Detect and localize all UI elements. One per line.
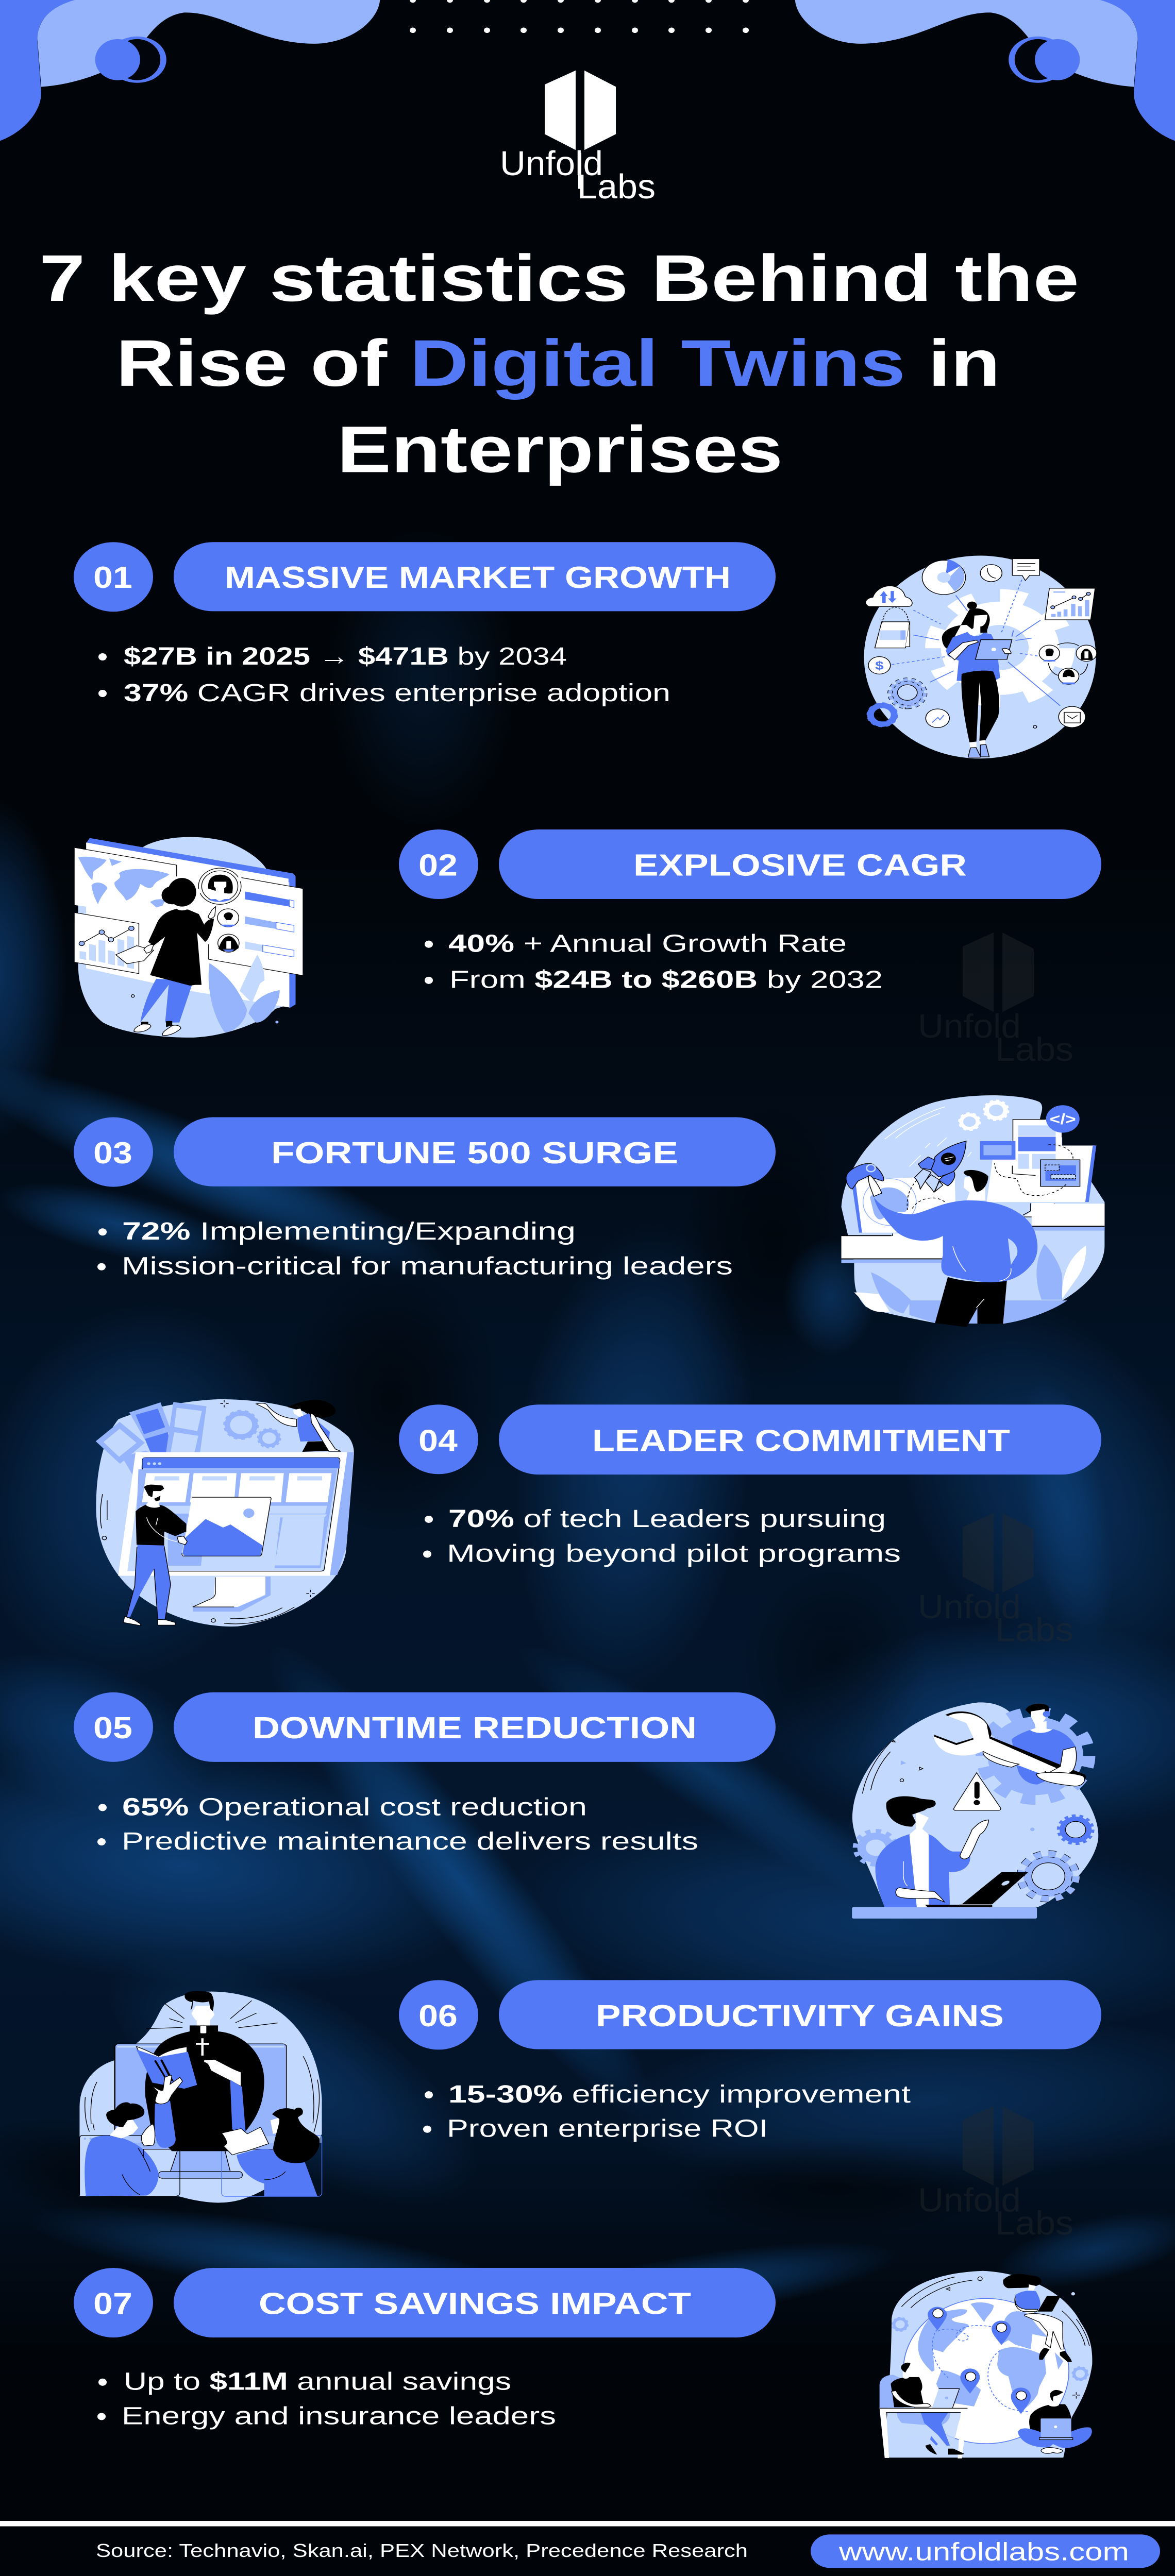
number badge 06: 06 — [418, 1998, 458, 2033]
section 04 — [96, 1399, 1101, 1626]
bullets 01: $27B in 2025 → $471B by 2034 — [124, 642, 567, 670]
number badge 02: 02 — [418, 848, 458, 882]
watermark logo 3 — [918, 2106, 1073, 2242]
code card: </> — [1050, 1111, 1076, 1127]
bullets 07 — [97, 2367, 556, 2430]
top left corner blob — [0, 0, 380, 141]
palette cards — [96, 1402, 207, 1476]
number badge 07: 07 — [93, 2286, 132, 2320]
bullets 06: 15-30% efficiency improvement — [448, 2080, 911, 2108]
gears — [893, 2318, 1087, 2380]
heading pill: explosive cagr — [499, 829, 1101, 899]
rocket — [914, 1141, 966, 1192]
logo: Unfold Labs — [500, 71, 656, 206]
watermark logo 3: Unfold — [918, 2181, 1021, 2218]
location pins — [928, 2307, 1031, 2414]
bullets 03: Mission-critical for manufacturing leaders — [122, 1252, 733, 1280]
code card — [1012, 1105, 1080, 1175]
globe — [903, 2298, 1069, 2444]
wrench — [934, 1711, 1086, 1786]
woman on laptop — [1003, 2274, 1072, 2362]
dashboard card — [1045, 588, 1095, 620]
illustration: global team around a globe — [879, 2271, 1093, 2459]
number badge 01 — [74, 542, 153, 612]
listener right — [222, 2108, 320, 2196]
number badge 05: 05 — [93, 1710, 132, 1745]
picture card — [181, 1497, 271, 1556]
desks — [842, 1204, 1104, 1263]
bullets 01 — [98, 642, 670, 706]
website pill — [811, 2534, 1160, 2568]
illustration: preacher on screen with listeners — [79, 1991, 323, 2203]
heading pill: leader commitment: LEADER COMMITMENT — [592, 1423, 1010, 1458]
listener left — [85, 2103, 159, 2196]
section 07 — [74, 2268, 1092, 2459]
bullets 05: 65% Operational cost reduction — [122, 1793, 587, 1821]
book — [137, 2046, 197, 2104]
dollar icon — [868, 657, 891, 674]
bullets 02: 40% + Annual Growth Rate — [448, 929, 847, 957]
small gear — [1059, 1816, 1092, 1843]
chart panel — [75, 912, 139, 974]
section 05 — [74, 1692, 1098, 1919]
watermark logo 2 — [918, 1513, 1073, 1649]
cloud — [866, 586, 912, 606]
bullets 03 — [97, 1217, 733, 1280]
heading pill: downtime reduction: DOWNTIME REDUCTION — [253, 1710, 697, 1745]
heading pill: explosive cagr: EXPLOSIVE CAGR — [633, 848, 967, 882]
warning sign — [954, 1773, 1001, 1810]
title: 7 key statistics Behind the — [39, 242, 1079, 315]
bullets 04: Moving beyond pilot programs — [447, 1539, 901, 1567]
heading pill: cost savings impact: COST SAVINGS IMPACT — [259, 2286, 691, 2320]
pie chart — [922, 559, 966, 595]
illustration: woman reviewing dashboards — [74, 837, 303, 1038]
title: Rise of Digital Twins in — [116, 327, 1000, 400]
woman figure — [116, 878, 214, 1036]
monitor — [118, 1452, 347, 1576]
source text: Source: Technavio, Skan.ai, PEX Network, Precedence Research — [96, 2540, 748, 2562]
decorative dots — [410, 0, 749, 33]
website pill: www.unfoldlabs.com — [838, 2537, 1129, 2566]
bullets 06: Proven enterprise ROI — [447, 2114, 768, 2142]
gears — [226, 1412, 279, 1447]
small gears — [960, 1101, 1008, 1130]
number badge 05 — [74, 1692, 153, 1762]
bullets 05 — [97, 1793, 698, 1855]
woman figure — [942, 602, 1012, 757]
watermark logo 1: Labs — [995, 1030, 1073, 1068]
trend icon — [926, 709, 949, 727]
calendar — [875, 607, 910, 648]
plant — [209, 955, 280, 1032]
avatars — [217, 909, 239, 952]
logo: Unfold Labs: Labs — [577, 167, 656, 206]
illustration: maintenance team with wrench and warning — [852, 1702, 1099, 1919]
heading pill: fortune 500 surge — [174, 1117, 776, 1187]
illustration: designers with large monitor — [96, 1399, 354, 1627]
bullets 02 — [425, 929, 883, 993]
large gear — [1021, 1854, 1076, 1899]
number badge 04: 04 — [418, 1423, 458, 1458]
woman at laptop — [876, 1796, 988, 1907]
heading pill: productivity gains: PRODUCTIVITY GAINS — [596, 1998, 1004, 2033]
bullets 05: Predictive maintenance delivers results — [122, 1827, 698, 1855]
illustration: woman with tablet and data icons — [864, 555, 1097, 758]
footer divider — [0, 2521, 1175, 2527]
phone icon — [980, 565, 1002, 582]
left monitor — [852, 1176, 955, 1247]
bullets 06 — [423, 2080, 911, 2142]
gears — [890, 680, 925, 707]
title — [39, 242, 1079, 486]
monitor stand — [193, 1577, 271, 1612]
top right corner blob — [795, 0, 1175, 141]
bullets 07: Energy and insurance leaders — [122, 2402, 556, 2430]
monitor — [79, 2044, 322, 2196]
laptop — [925, 1872, 1028, 1908]
team network — [1039, 643, 1097, 684]
title: Enterprises — [337, 413, 783, 486]
magnifier profile — [198, 868, 241, 919]
bullets 04 — [423, 1504, 901, 1567]
section 02 — [75, 829, 1101, 1038]
leaves — [854, 1244, 1086, 1313]
heading pill: leader commitment — [499, 1404, 1101, 1475]
heading pill: downtime reduction — [174, 1692, 776, 1762]
number badge 04 — [399, 1404, 478, 1474]
support man — [1012, 1704, 1076, 1785]
number badge 07 — [74, 2268, 153, 2337]
number badge 03: 03 — [93, 1136, 132, 1170]
desk — [852, 1907, 1037, 1919]
illustration: man launching rocket on screens — [841, 1095, 1105, 1327]
number badge 02 — [399, 829, 478, 899]
code window — [1040, 1160, 1080, 1187]
man with laptop — [1018, 2390, 1092, 2453]
mail icon — [1059, 706, 1085, 727]
bullets 01: 37% CAGR drives enterprise adoption — [124, 679, 670, 706]
section 01 — [74, 542, 1097, 758]
watermark logo 3: Labs — [995, 2204, 1073, 2242]
number badge 03 — [74, 1117, 153, 1187]
man at desk — [880, 2363, 968, 2459]
speech bubble — [1012, 559, 1039, 581]
heading pill: fortune 500 surge: FORTUNE 500 SURGE — [271, 1136, 678, 1170]
section 03 — [74, 1095, 1104, 1327]
heading pill: cost savings impact — [174, 2268, 776, 2337]
man figure — [846, 1163, 1037, 1327]
bullets 02: From $24B to $260B by 2032 — [449, 965, 883, 993]
map panel — [75, 848, 177, 919]
bullets 04: 70% of tech Leaders pursuing — [448, 1504, 886, 1532]
bullets 03: 72% Implementing/Expanding — [122, 1217, 576, 1245]
bullets 07: Up to $11M annual savings — [124, 2367, 511, 2395]
number badge 01: 01 — [93, 560, 132, 595]
background gears — [857, 1712, 1089, 1863]
watermark logo 1 — [918, 933, 1073, 1068]
logo: Unfold Labs: Unfold — [500, 145, 603, 183]
watermark logo 1: Unfold — [918, 1007, 1021, 1045]
number badge 06 — [399, 1980, 478, 2049]
section 06 — [79, 1980, 1101, 2202]
heading pill: massive market growth: MASSIVE MARKET GROWTH — [225, 560, 731, 595]
watermark logo 2: Labs — [995, 1611, 1073, 1649]
profiles panel — [209, 877, 303, 975]
heading pill: massive market growth — [174, 542, 776, 611]
dollar icon: $ — [875, 659, 884, 672]
man figure — [123, 1485, 187, 1625]
heading pill: productivity gains — [499, 1980, 1101, 2049]
watermark logo 2: Unfold — [918, 1588, 1021, 1625]
preacher — [145, 1991, 264, 2151]
woman figure — [256, 1400, 341, 1452]
right monitor — [987, 1145, 1096, 1217]
